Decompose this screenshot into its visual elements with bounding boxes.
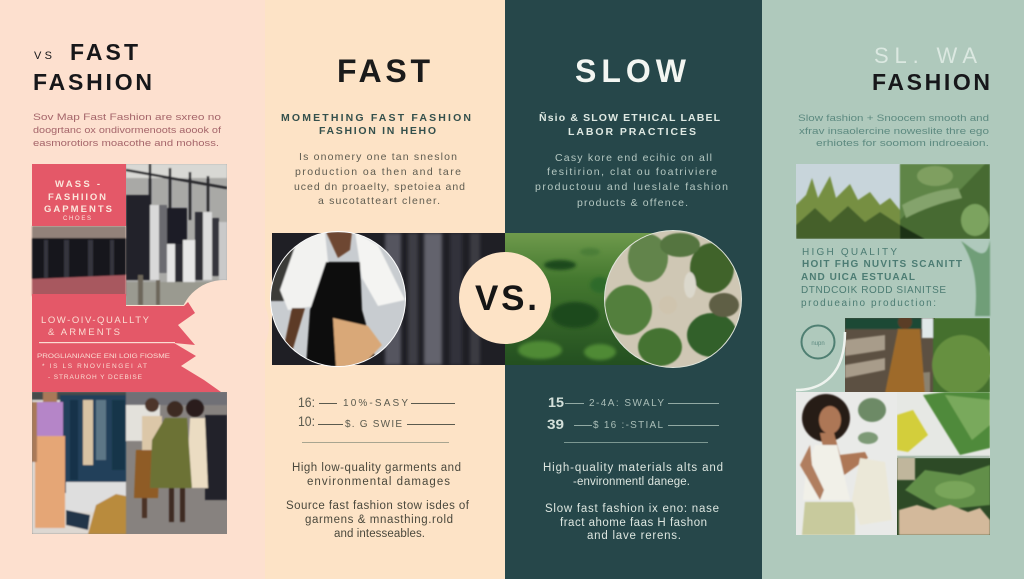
text block: fast summary: environmental damages bbox=[307, 476, 450, 488]
text block: fast fashion intro: easmorotiors moacothe and mohoss. bbox=[33, 138, 219, 149]
text block: slow fashion intro: xfrav insaolercine noweslite thre ego bbox=[799, 126, 989, 137]
text block: high quality: produeaino production: bbox=[801, 298, 936, 309]
panel: slow fashion intro bbox=[762, 0, 1024, 579]
text block: slow description: products & offence. bbox=[577, 197, 688, 209]
text block: fast summary: Source fast fashion stow isdes of bbox=[286, 500, 470, 512]
icon: round badge: nupn bbox=[811, 341, 825, 347]
badge: vs: VS. bbox=[475, 279, 537, 318]
photo circle: green leaves bbox=[604, 230, 742, 368]
text block: high quality bbox=[801, 247, 962, 309]
title: vs fast fashion: FAST bbox=[70, 39, 138, 65]
text block: slow description: Casy kore end ecihic on all bbox=[555, 152, 712, 164]
banner: low quality garments: PROGLIANIANCE ENI LOIG FIOSME bbox=[37, 353, 171, 360]
text block: fast fashion intro: doogrtanc ox ondivormenoots aoook of bbox=[33, 125, 221, 136]
text block: fast summary: garmens & mnasthing.rold bbox=[305, 514, 453, 526]
stats: slow fashion bbox=[547, 394, 719, 443]
badge: vs bbox=[459, 252, 551, 344]
text block: high quality: HOIT FHG NUVITS SCANITT bbox=[802, 259, 962, 270]
stats: fast fashion: 10%-SASY bbox=[343, 398, 408, 409]
subheading: fast fashion bbox=[281, 112, 471, 137]
text block: slow summary: and lave rerens. bbox=[587, 530, 681, 542]
stats: slow fashion: $ 16 :-STIAL bbox=[593, 420, 663, 431]
heading: slow: SLOW bbox=[575, 53, 687, 89]
stats: fast fashion: 16: bbox=[298, 394, 315, 410]
photo: garment factory racks bbox=[126, 164, 227, 305]
text block: slow summary bbox=[543, 462, 723, 542]
title: vs fast fashion bbox=[33, 39, 152, 95]
illustration: leaf edge bbox=[961, 240, 990, 316]
banner: low quality garments: * IS LS RNOVIENGEI AT bbox=[42, 363, 147, 370]
subheading: fast fashion: MOMETHING FAST FASHION bbox=[281, 112, 471, 124]
photo: dark hanging garments bbox=[272, 233, 505, 365]
text block: slow summary: High-quality materials alts and bbox=[543, 462, 723, 474]
title: vs fast fashion: FASHION bbox=[33, 69, 152, 95]
label box: mass fashion garments: GAPMENTS bbox=[44, 204, 112, 215]
stats: slow fashion: 15 bbox=[548, 394, 564, 410]
text block: slow description: fesitirion, clat ou foatriviere bbox=[547, 166, 717, 178]
panel: slow column bbox=[505, 0, 762, 579]
label box: mass fashion garments: WASS - bbox=[55, 179, 100, 190]
text block: slow summary: Slow fast fashion ix eno: nase bbox=[545, 503, 719, 515]
photo: green field bbox=[505, 233, 653, 365]
text block: slow description bbox=[535, 152, 728, 209]
text block: fast description: production oa then and tare bbox=[295, 166, 461, 178]
text block: fast description bbox=[294, 151, 465, 207]
text block: slow fashion intro: Slow fashion + Snoocem smooth and bbox=[798, 113, 989, 124]
photo: leaves, oil and fibre bundles bbox=[897, 392, 990, 535]
label box: mass fashion garments: CHOES bbox=[63, 216, 91, 222]
text block: high quality: DTNDCOIK RODD SIANITSE bbox=[801, 285, 946, 296]
text block: high quality: AND UICA ESTUAAL bbox=[801, 272, 915, 283]
text block: slow fashion intro bbox=[798, 113, 989, 149]
text block: slow summary: fract ahome faas H fashon bbox=[560, 517, 707, 529]
label box: mass fashion garments: FASHIION bbox=[48, 192, 106, 203]
text block: high quality: HIGH QUALITY bbox=[802, 247, 897, 258]
text block: fast description: a sucotatteart clener. bbox=[318, 195, 440, 207]
banner: low quality garments bbox=[32, 294, 221, 392]
subheading: slow ethical labor bbox=[539, 111, 721, 138]
photo: clothing rack and street models bbox=[32, 392, 227, 534]
text block: fast summary: and intesseables. bbox=[334, 528, 425, 540]
decorative circle cut-out bbox=[179, 280, 269, 370]
title: slow fashion: FASHION bbox=[872, 69, 990, 95]
label box: mass fashion garments bbox=[32, 164, 126, 226]
stats: slow fashion: 39 bbox=[547, 416, 564, 432]
photo: woman holding bag bbox=[796, 392, 898, 535]
stats: fast fashion bbox=[298, 394, 455, 443]
text block: fast summary bbox=[286, 462, 470, 540]
title: slow fashion: SL. WA bbox=[874, 43, 977, 68]
photo: grass and leaves bbox=[796, 164, 990, 239]
decorative white arc bbox=[796, 332, 845, 390]
banner: low quality garments: LOW-OIV-QUALLTY bbox=[41, 315, 150, 326]
stats: fast fashion: $. G SWIE bbox=[345, 419, 402, 430]
photo: woven fibre and brown garment bbox=[845, 315, 992, 395]
text block: fast fashion intro: Sov Map Fast Fashion are sxreo no bbox=[33, 112, 221, 123]
subheading: fast fashion: FASHION IN HEHO bbox=[319, 125, 436, 137]
text block: fast summary: High low-quality garments and bbox=[292, 462, 461, 474]
stats: slow fashion: 2-4A: SWALY bbox=[589, 398, 664, 409]
heading: fast: FAST bbox=[337, 53, 430, 89]
panel: fast column bbox=[265, 0, 505, 579]
stats: fast fashion: 10: bbox=[298, 413, 315, 429]
icon: round badge bbox=[802, 326, 834, 358]
title: vs fast fashion: VS bbox=[34, 50, 52, 62]
panel: fast fashion intro bbox=[0, 0, 265, 579]
banner: low quality garments: & ARMENTS bbox=[48, 327, 120, 338]
photo circle: woman in white shirt with bag bbox=[270, 231, 406, 367]
photo: dark garment rack bbox=[32, 226, 126, 296]
title: slow fashion bbox=[872, 43, 990, 95]
subheading: slow ethical labor: LABOR PRACTICES bbox=[568, 126, 696, 138]
text block: slow fashion intro: erhiotes for soomom indroeaion. bbox=[816, 138, 989, 149]
text block: slow summary: -environmentl danege. bbox=[573, 476, 690, 488]
text block: slow description: productouu and lueslale fashion bbox=[535, 181, 728, 193]
banner: low quality garments: - STRAUROH Y DCEBISE bbox=[48, 374, 143, 381]
subheading: slow ethical labor: Ñsio & SLOW ETHICAL LABEL bbox=[539, 111, 721, 124]
text block: fast description: Is onomery one tan sneslon bbox=[299, 151, 457, 163]
text block: fast description: uced dn proaelty, spetoiea and bbox=[294, 181, 465, 193]
text block: fast fashion intro bbox=[33, 112, 221, 149]
